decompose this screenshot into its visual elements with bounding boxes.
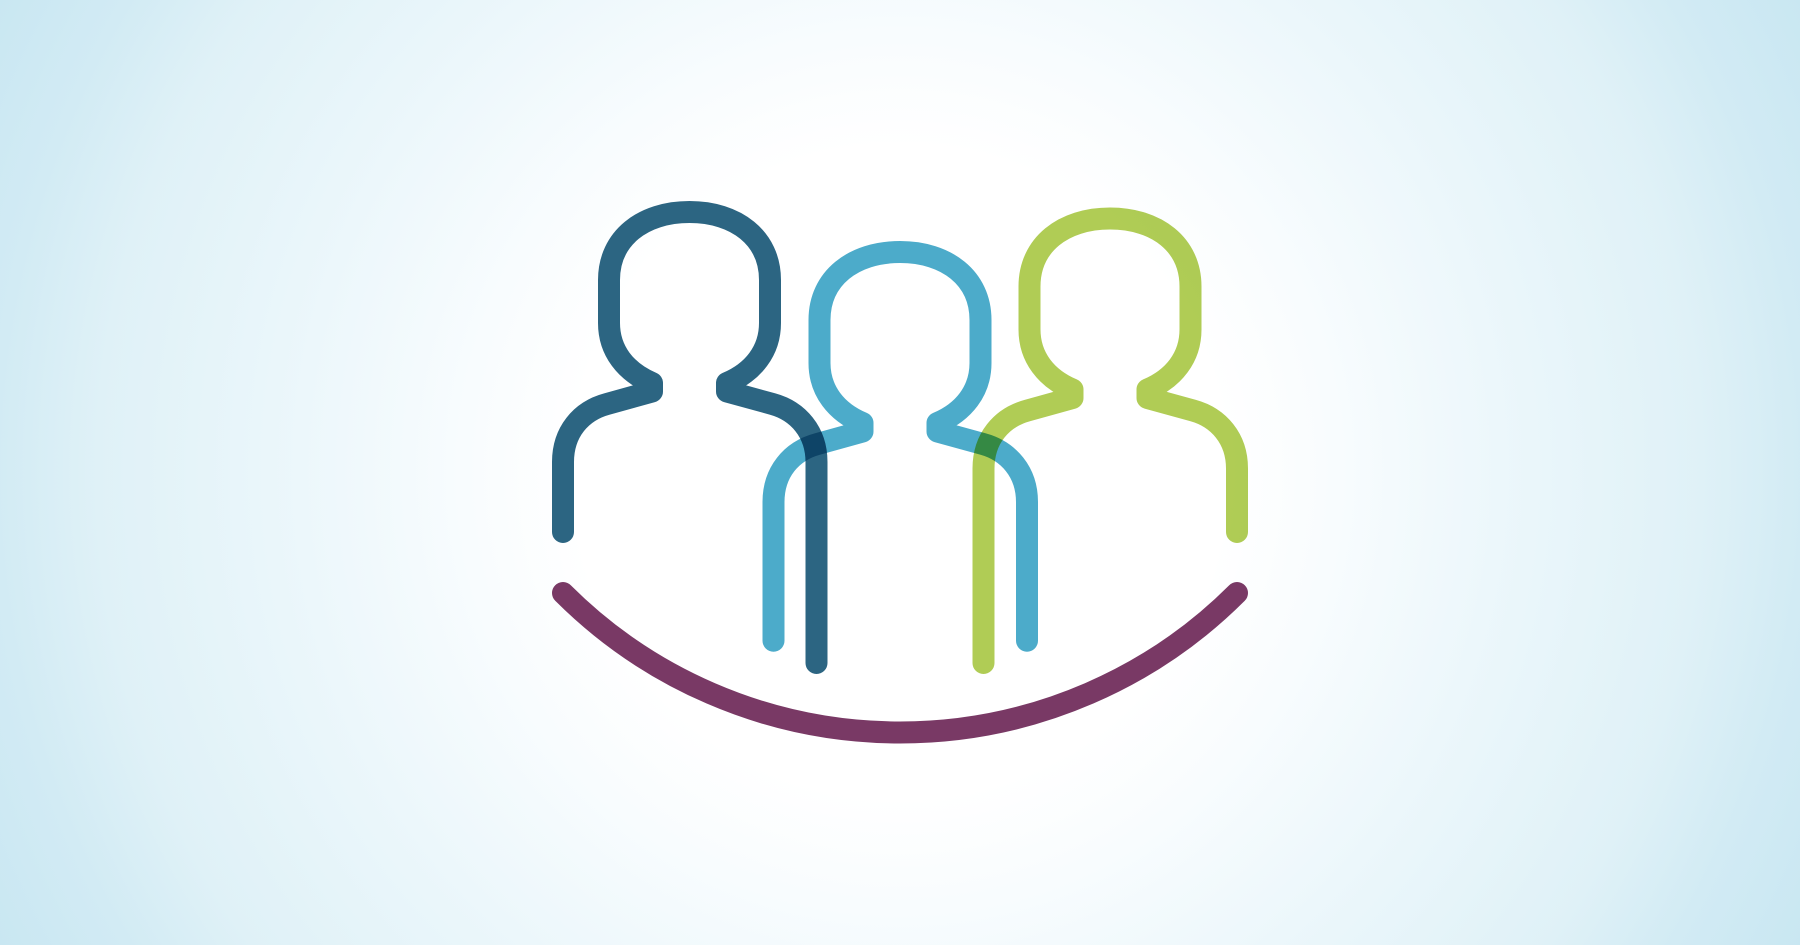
icon: purple smile arc bbox=[563, 593, 1237, 733]
icon: dark teal person (left) bbox=[563, 212, 816, 663]
icon: green person (right) bbox=[984, 218, 1237, 663]
icon: blue person (centre) bbox=[774, 252, 1027, 641]
